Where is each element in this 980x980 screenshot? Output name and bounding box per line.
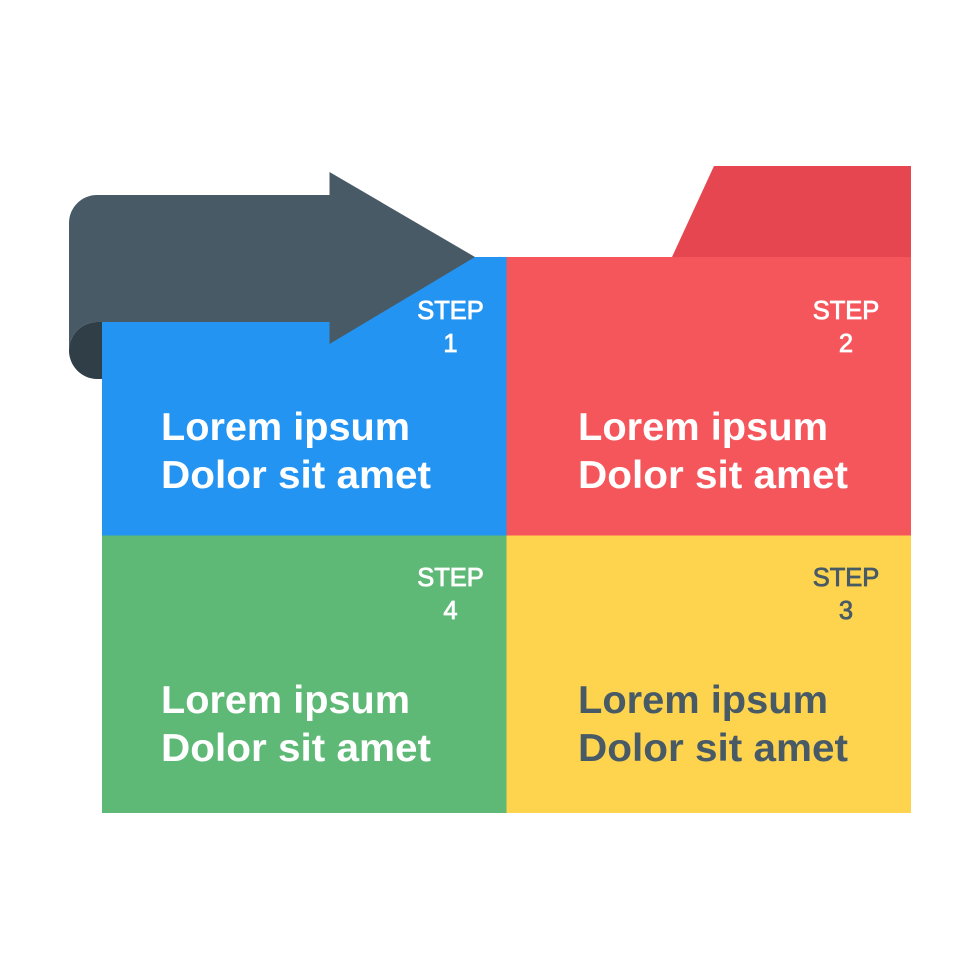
panel: step 4 (102, 536, 506, 813)
step 2 label: STEP (813, 297, 879, 325)
step 4 label: 4 (443, 597, 458, 625)
arrow roll shadow (69, 322, 102, 379)
step 3 label: STEP (813, 564, 879, 592)
arrow banner (69, 172, 475, 350)
step 3 text: Dolor sit amet (578, 727, 848, 770)
step 4 text: Lorem ipsum (161, 679, 410, 722)
step 1 text: Dolor sit amet (161, 454, 431, 497)
panel: step 1 (102, 257, 506, 536)
step 2 text: Dolor sit amet (578, 454, 848, 497)
step 1 text: Lorem ipsum (161, 406, 410, 449)
panel: step 2 (506, 257, 911, 536)
folder tab (672, 166, 911, 257)
step 3 text: Lorem ipsum (578, 679, 828, 722)
step 1 label: STEP (417, 297, 484, 325)
step 4 text: Dolor sit amet (161, 727, 431, 770)
step 1 label: 1 (443, 330, 458, 358)
step 2 text: Lorem ipsum (578, 406, 828, 449)
step 2 label: 2 (839, 330, 853, 358)
step 4 label: STEP (417, 564, 484, 592)
step 3 label: 3 (839, 597, 853, 625)
panel: step 3 (506, 536, 911, 813)
